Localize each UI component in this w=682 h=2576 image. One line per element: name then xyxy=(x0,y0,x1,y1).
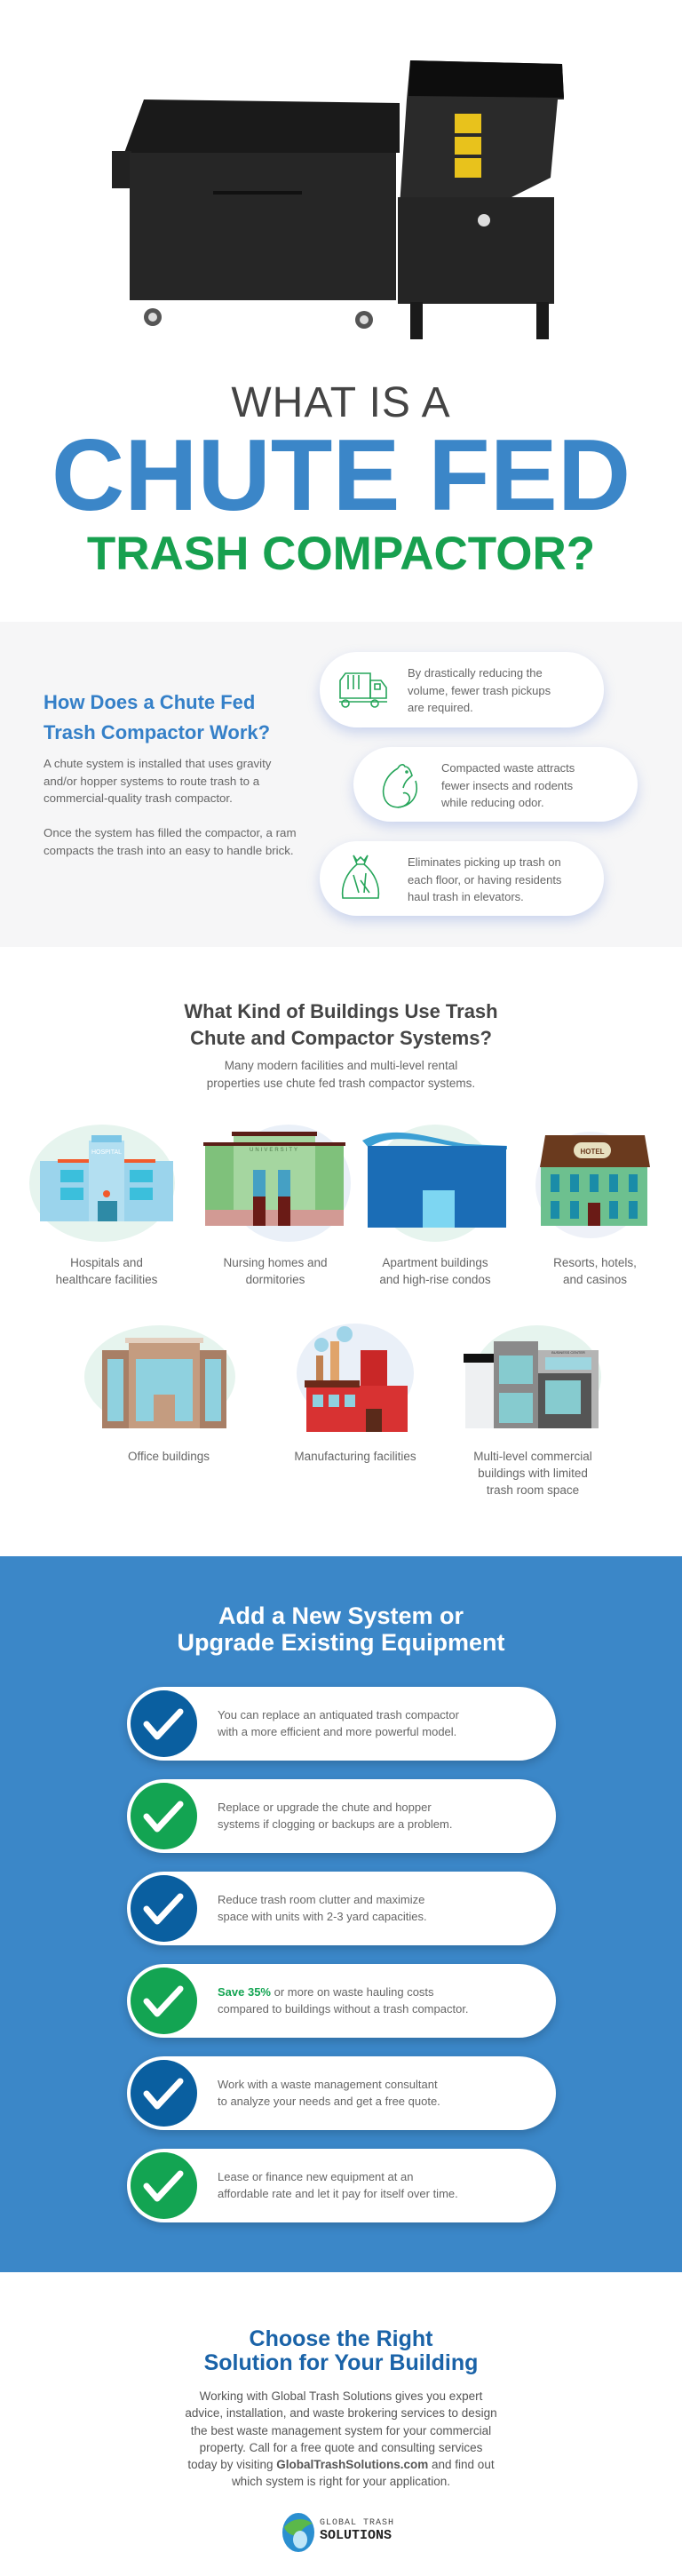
card: truck: are required. xyxy=(408,701,473,714)
item 6 xyxy=(127,2149,556,2222)
text: WHAT IS A xyxy=(231,379,451,426)
card: truck: volume, fewer trash pickups xyxy=(408,684,551,696)
text: closing: advice, installation, and waste brokering services to design xyxy=(185,2406,497,2420)
label: Office buildings xyxy=(128,1450,210,1463)
heading: upgrade: Upgrade Existing Equipment xyxy=(177,1629,505,1656)
card: rodent: fewer insects and rodents xyxy=(441,778,573,792)
hero: compactor illustration xyxy=(112,60,564,339)
text: explanation xyxy=(44,757,297,856)
building: factory xyxy=(294,1324,416,1463)
card: rodent xyxy=(353,747,638,822)
logo: GLOBAL TRASH xyxy=(320,2518,394,2528)
heading: how does it work: Trash Compactor Work? xyxy=(44,721,270,743)
card: rodent: Compacted waste attracts xyxy=(441,761,575,775)
item 1: with a more efficient and more powerful model. xyxy=(218,1725,456,1738)
text: closing: Working with Global Trash Solutions gives you expert xyxy=(200,2389,482,2403)
panel: upgrade xyxy=(0,1556,682,2272)
building: apartment xyxy=(362,1125,507,1286)
label: Multi-level commercial xyxy=(473,1450,592,1463)
text: buildings intro xyxy=(207,1059,475,1090)
label xyxy=(379,1256,491,1286)
icon: mouse xyxy=(382,764,417,808)
text: TRASH COMPACTOR? xyxy=(87,528,595,580)
heading: how does it work: How Does a Chute Fed xyxy=(44,691,255,713)
text: buildings intro: properties use chute fed trash compactor systems. xyxy=(207,1077,475,1090)
label: trash room space xyxy=(487,1483,579,1497)
heading: upgrade: Add a New System or xyxy=(218,1602,464,1629)
item 5 xyxy=(127,2056,556,2130)
item 6: Lease or finance new equipment at an xyxy=(218,2170,413,2183)
dumpster lid xyxy=(124,99,400,153)
label xyxy=(553,1256,637,1286)
text: closing: property. Call for a free quote and consulting services xyxy=(200,2441,482,2454)
text: closing xyxy=(185,2389,497,2488)
label: Nursing homes and xyxy=(223,1256,328,1269)
text: CHUTE FED xyxy=(52,419,630,532)
label: Apartment buildings xyxy=(382,1256,488,1269)
card: trash bag xyxy=(320,841,604,916)
hopper xyxy=(400,60,564,206)
label: Manufacturing facilities xyxy=(294,1450,416,1463)
heading: buildings xyxy=(184,1000,498,1049)
building: hospital: HOSPITAL xyxy=(91,1149,122,1156)
icon: truck xyxy=(339,672,387,708)
heading: buildings: What Kind of Buildings Use Trash xyxy=(184,1000,498,1022)
building: university: UNIVERSITY xyxy=(250,1148,299,1153)
text: closing: which system is right for your application. xyxy=(232,2475,450,2488)
logo: SOLUTIONS xyxy=(320,2528,392,2543)
logo xyxy=(282,2513,394,2552)
title xyxy=(52,379,630,580)
heading: choose the right solution xyxy=(204,2326,478,2375)
card: trash bag: each floor, or having residents xyxy=(408,872,561,886)
label: and high-rise condos xyxy=(379,1273,491,1286)
text: closing: today by visiting GlobalTrashSolutions.com and find out xyxy=(187,2458,495,2471)
item 1 xyxy=(127,1687,556,1761)
item 4: Save 35% or more on waste hauling costs xyxy=(218,1985,434,1999)
panel: how it works xyxy=(0,622,682,947)
heading: choose the right solution: Choose the Right xyxy=(250,2326,432,2351)
heading: buildings: Chute and Compactor Systems? xyxy=(190,1027,492,1049)
item 5: Work with a waste management consultant xyxy=(218,2078,438,2091)
item 4 xyxy=(127,1964,556,2038)
label: buildings with limited xyxy=(478,1467,588,1480)
heading: upgrade xyxy=(177,1602,505,1656)
label: Hospitals and xyxy=(70,1256,143,1269)
item 5: to analyze your needs and get a free quote. xyxy=(218,2095,440,2108)
building: hotel: HOTEL xyxy=(580,1148,605,1156)
icon: bag xyxy=(341,855,380,899)
item 4: compared to buildings without a trash compactor. xyxy=(218,2002,469,2015)
label: Resorts, hotels, xyxy=(553,1256,637,1269)
item 2: systems if clogging or backups are a problem. xyxy=(218,1817,452,1831)
text: closing: the best waste management system for your commercial xyxy=(191,2424,491,2437)
heading: how does it work xyxy=(44,691,270,743)
item 3: space with units with 2-3 yard capacities. xyxy=(218,1910,427,1923)
text: buildings intro: Many modern facilities and multi-level rental xyxy=(225,1059,457,1072)
building: hospital xyxy=(29,1125,175,1286)
card: trash bag: haul trash in elevators. xyxy=(408,890,524,903)
card: rodent: while reducing odor. xyxy=(441,796,544,809)
item 2: Replace or upgrade the chute and hopper xyxy=(218,1801,432,1814)
card: truck: By drastically reducing the xyxy=(408,666,543,680)
building: hotel xyxy=(535,1132,650,1286)
label xyxy=(223,1256,328,1286)
building: commercial: BUSINESS CENTER xyxy=(551,1350,585,1355)
item 1: You can replace an antiquated trash compactor xyxy=(218,1708,459,1721)
compactor base xyxy=(398,197,554,304)
label xyxy=(56,1256,157,1286)
text: explanation: Once the system has filled the compactor, a ram compacts the trash into an easy to handle brick. xyxy=(44,826,297,856)
label: dormitories xyxy=(246,1273,305,1286)
building: commercial xyxy=(464,1325,601,1497)
item 6: affordable rate and let it pay for itself over time. xyxy=(218,2187,458,2200)
item 2 xyxy=(127,1779,556,1853)
building: office xyxy=(84,1325,235,1463)
building: university xyxy=(203,1125,351,1286)
label: healthcare facilities xyxy=(56,1273,157,1286)
card: truck xyxy=(320,652,604,727)
item 3 xyxy=(127,1872,556,1945)
card: trash bag: Eliminates picking up trash on xyxy=(408,855,561,869)
label: and casinos xyxy=(563,1273,627,1286)
item 3: Reduce trash room clutter and maximize xyxy=(218,1893,424,1906)
text: explanation: A chute system is installed that uses gravity and/or hopper systems to route trash to a commercial-quality trash compactor. xyxy=(44,757,271,805)
label xyxy=(473,1450,592,1497)
heading: choose the right solution: Solution for Your Building xyxy=(204,2350,478,2375)
